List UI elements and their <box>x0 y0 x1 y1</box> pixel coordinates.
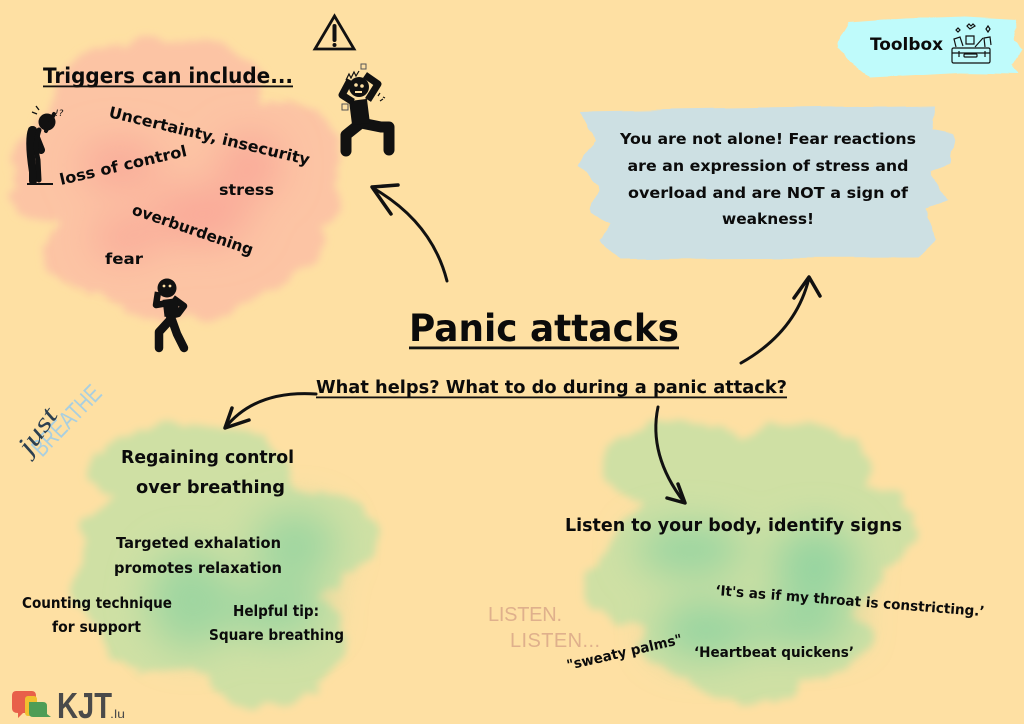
trigger: fear: fear <box>105 250 143 268</box>
subtitle: What helps? What to do during a panic attack? <box>316 377 787 398</box>
heading: body signs: Listen to your body, identify signs <box>565 515 902 536</box>
tip: counting technique <box>22 594 172 636</box>
message text: overload and are NOT a sign of <box>628 184 908 202</box>
trigger: loss of control: loss of control <box>58 142 189 189</box>
logo icon <box>12 691 51 718</box>
icon: toolbox <box>952 24 991 63</box>
logo: KJT.lu <box>12 685 125 724</box>
decoration: listen lettering: LISTEN. <box>488 604 562 626</box>
arrow: to triggers <box>372 185 447 281</box>
message text: weakness! <box>722 210 814 228</box>
message text <box>619 130 916 228</box>
panel: body signs blob <box>585 421 915 702</box>
arrow: to breathing <box>225 394 316 428</box>
heading: breathing: Regaining control <box>121 447 294 468</box>
tip: counting technique: for support <box>52 618 141 636</box>
panel: toolbox label <box>838 16 1022 78</box>
icon: worried figure: !? <box>55 109 64 119</box>
decoration: just breathe lettering: just <box>9 401 64 463</box>
title: Panic attacks <box>409 307 679 350</box>
trigger: stress: stress <box>219 181 274 199</box>
arrow: to body signs <box>656 407 685 503</box>
cyan brush <box>838 16 1022 78</box>
decoration: just breathe lettering: BREATHE <box>26 379 107 462</box>
tip: square breathing: Helpful tip: <box>233 602 319 620</box>
toolbox text: Toolbox <box>870 35 943 55</box>
trigger: overburdening: overburdening <box>130 201 256 259</box>
tip: square breathing: Square breathing <box>209 626 344 644</box>
tip: targeted exhalation <box>114 534 282 577</box>
trigger: uncertainty: Uncertainty, insecurity <box>107 103 312 169</box>
decoration: just breathe lettering <box>9 379 107 463</box>
heading: breathing: over breathing <box>136 477 285 498</box>
icon: cowering figure <box>156 278 184 348</box>
icon: worried figure <box>27 106 64 185</box>
panel: breathing blob <box>75 424 380 707</box>
quote: heartbeat: ‘Heartbeat quickens’ <box>694 645 854 661</box>
icon: panicking figure <box>342 64 389 151</box>
panel: reassurance message <box>578 106 955 259</box>
icon: warning triangle <box>315 16 354 49</box>
arrow: to reassurance <box>741 277 820 363</box>
tip: targeted exhalation: promotes relaxation <box>114 559 282 577</box>
heading: breathing <box>121 447 294 498</box>
tip: counting technique: Counting technique <box>22 594 172 612</box>
logo: KJT.lu: .lu <box>110 707 125 721</box>
decoration: listen lettering <box>488 604 600 652</box>
tip: targeted exhalation: Targeted exhalation <box>116 534 281 552</box>
brush background <box>578 106 955 259</box>
heading: triggers: Triggers can include... <box>43 64 293 88</box>
decoration: listen lettering: LISTEN... <box>510 630 600 652</box>
quote: throat: ‘It's as if my throat is constricting.’ <box>715 583 985 620</box>
panel: triggers blob <box>10 39 340 320</box>
tip: square breathing <box>209 602 344 644</box>
message text: You are not alone! Fear reactions <box>619 130 916 148</box>
quote: sweaty palms: "sweaty palms" <box>565 632 684 674</box>
message text: are an expression of stress and <box>628 157 908 175</box>
